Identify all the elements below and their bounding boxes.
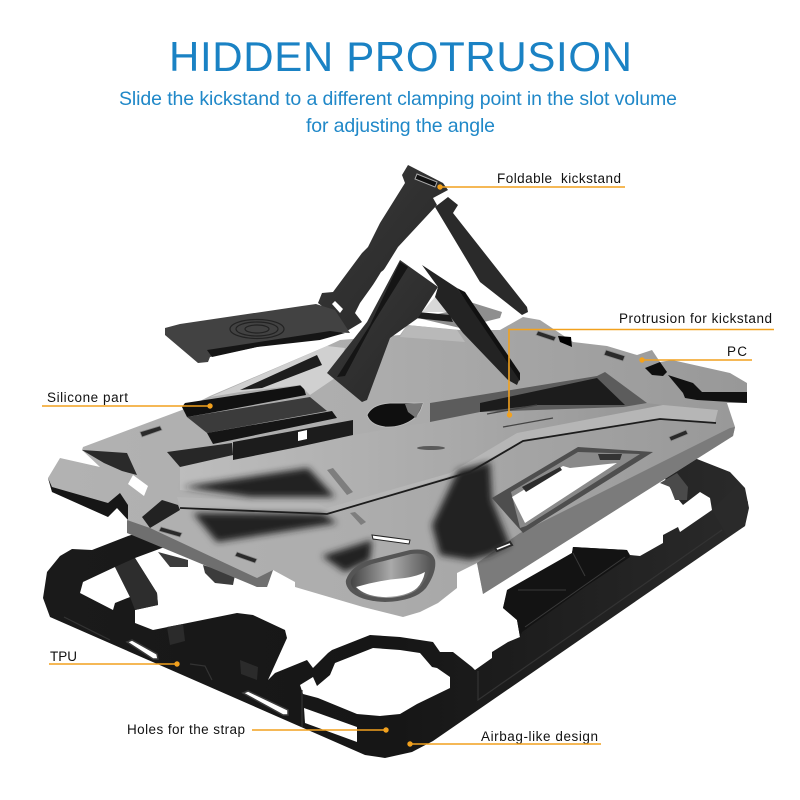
PC tab recess — [645, 362, 667, 376]
callout: PC: PC — [727, 344, 747, 359]
lower hole: inner wall — [351, 554, 431, 598]
upper light strip — [210, 346, 345, 397]
small oval mark — [417, 446, 445, 450]
left recess — [82, 450, 137, 475]
shield tabs — [167, 624, 185, 645]
left notch — [128, 475, 148, 496]
slots — [536, 331, 556, 341]
right recess ramp — [430, 372, 647, 422]
subtitle: Slide the kickstand to a different clamping point in the slot volume — [119, 88, 677, 110]
lower hole: white — [356, 572, 425, 597]
frame opening: main — [135, 470, 712, 680]
callout: foldable kickstand: Foldable kickstand — [497, 171, 621, 186]
callout: protrusion for kickstand — [507, 311, 774, 418]
subtitle: for adjusting the angle — [306, 115, 495, 137]
central round cutout — [367, 403, 423, 427]
frame highlights — [64, 530, 722, 727]
callout: airbag-like design: Airbag-like design — [481, 729, 598, 744]
protrusion slits — [487, 405, 553, 427]
callout: silicone part — [42, 390, 213, 409]
strap hole right — [243, 691, 288, 715]
frame opening: corner — [80, 567, 130, 610]
bevel under line — [180, 419, 716, 514]
frame opening: bottom slot — [304, 708, 357, 742]
top sheet bevel — [177, 405, 718, 513]
callout: protrusion for kickstand: Protrusion for kickstand — [619, 311, 772, 326]
left dark wedge — [142, 500, 180, 528]
subtitle — [119, 88, 677, 137]
window frame — [492, 447, 653, 533]
arm inner gap — [360, 269, 385, 309]
title: HIDDEN PROTRUSION — [169, 33, 632, 80]
strap hole left — [127, 640, 158, 659]
product: PC hard plate — [48, 297, 747, 617]
callout: PC — [639, 344, 752, 363]
callout: holes for the strap — [127, 722, 389, 737]
foot panel — [165, 304, 350, 363]
right recess channel — [480, 378, 625, 412]
plate right rim — [477, 427, 735, 594]
hinge slot — [415, 174, 437, 187]
upper dark wedge — [240, 355, 322, 390]
callout: TPU: TPU — [50, 649, 77, 664]
frame wedge right — [503, 547, 630, 637]
raised gray piece — [418, 302, 502, 328]
silicone pad — [187, 397, 327, 433]
dark recess left — [167, 443, 233, 467]
shoulder right — [712, 484, 748, 537]
product: TPU frame — [43, 450, 749, 758]
foot logo — [230, 320, 284, 338]
product: hanging tabs — [158, 552, 235, 585]
product: kickstand upper arm — [165, 165, 528, 363]
left ear side — [48, 478, 128, 520]
callout: TPU — [49, 649, 180, 667]
callout: silicone part: Silicone part — [47, 390, 128, 405]
sponge shadows — [183, 462, 510, 572]
callout: airbag-like design — [407, 729, 601, 747]
plate lower left bevel — [127, 520, 273, 587]
diagonal marks — [327, 468, 353, 495]
small white square — [298, 430, 307, 441]
callout: holes for the strap: Holes for the strap — [127, 722, 245, 737]
frame opening: bottom centre — [300, 648, 450, 716]
product: kickstand lower — [327, 260, 520, 402]
white slot — [372, 535, 410, 544]
lower hole: rim — [346, 549, 435, 602]
callout: foldable kickstand — [437, 171, 625, 190]
top sheet — [180, 403, 663, 510]
frame gussets: shoulder — [115, 558, 158, 610]
